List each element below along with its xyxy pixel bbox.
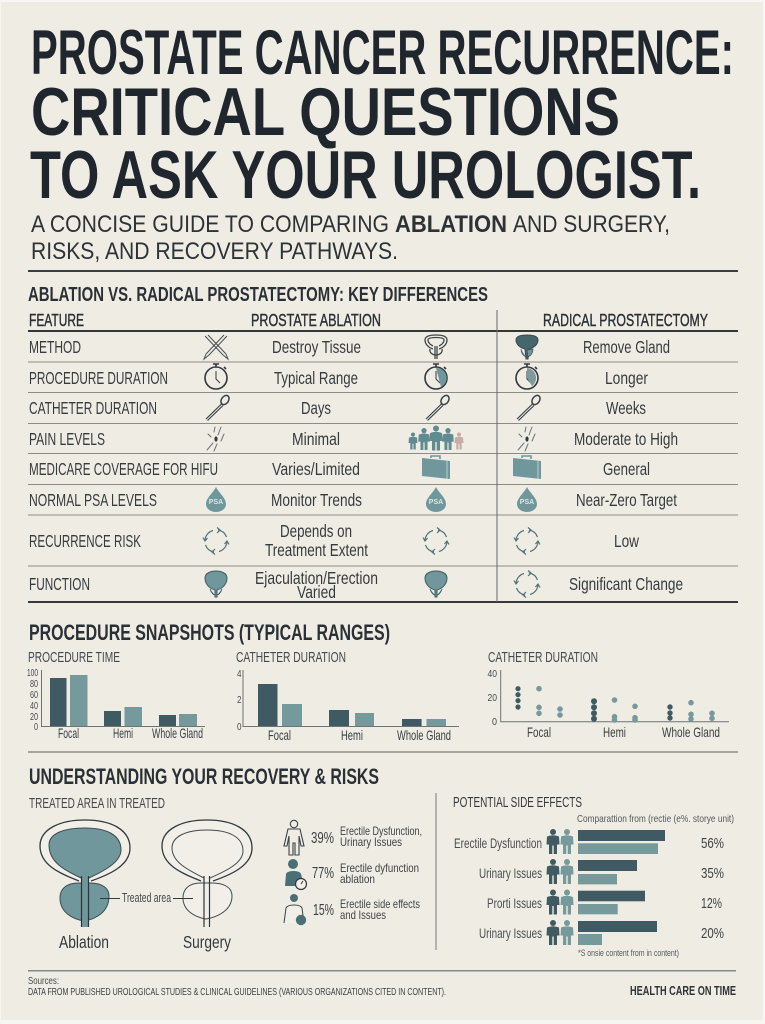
row: function xyxy=(29,568,683,602)
diagram: surgery prostate xyxy=(162,820,252,952)
stat: 77 percent: ablation xyxy=(340,872,375,886)
bar chart: catheter duration: 0 xyxy=(237,721,242,733)
bar chart: procedure time: Hemi xyxy=(113,725,133,741)
callout: treated area: Treated area xyxy=(122,891,171,905)
row: function: Ejaculation/Erection xyxy=(255,568,378,588)
table header xyxy=(29,310,708,330)
title: CRITICAL QUESTIONS xyxy=(31,74,620,150)
bar chart: procedure time: PROCEDURE TIME xyxy=(28,650,120,666)
heading: recovery and risks: UNDERSTANDING YOUR RECOVERY & RISKS xyxy=(29,764,379,789)
row: method: METHOD xyxy=(29,337,81,357)
row: pain levels xyxy=(29,426,678,451)
row: recurrence risk: RECURRENCE RISK xyxy=(29,531,141,551)
table header: PROSTATE ABLATION xyxy=(251,310,381,330)
stat: 15 percent xyxy=(284,894,420,925)
sources: Sources: xyxy=(28,975,59,987)
diagram: ablation prostate xyxy=(40,820,130,952)
stat: 15 percent: 15% xyxy=(313,902,334,919)
row: pain levels: Minimal xyxy=(292,429,340,449)
row: medicare coverage xyxy=(29,456,650,479)
bar chart: procedure time: Whole Gland xyxy=(152,725,203,741)
row: catheter duration: Days xyxy=(301,398,331,418)
side effect row: urinary issues xyxy=(479,859,724,884)
row: function: Varied xyxy=(297,582,336,602)
row: normal psa levels: Near-Zero Target xyxy=(576,490,677,510)
row: normal psa levels: Monitor Trends xyxy=(271,490,362,510)
stat: 15 percent: and Issues xyxy=(340,908,386,922)
bar chart: procedure time: Focal xyxy=(58,725,79,741)
side effect row: prorti issues: 12% xyxy=(701,895,722,912)
row: function: FUNCTION xyxy=(29,574,90,594)
dot plot: catheter duration xyxy=(488,650,729,740)
row: function: Significant Change xyxy=(569,574,683,594)
side effect row: erectile dysfunction: Erectile Dysfunction xyxy=(454,835,542,851)
row: procedure duration: Typical Range xyxy=(274,368,358,388)
bar chart: catheter duration: CATHETER DURATION xyxy=(236,650,346,666)
row: pain levels: Moderate to High xyxy=(574,429,678,449)
table header: FEATURE xyxy=(29,310,84,330)
row: medicare coverage: MEDICARE COVERAGE FOR HIFU xyxy=(29,459,218,479)
row: procedure duration: Longer xyxy=(605,368,648,388)
dot plot: catheter duration: 40 xyxy=(488,668,497,680)
row: recurrence risk xyxy=(29,521,639,560)
stat: 39 percent xyxy=(284,820,422,855)
subtitle: AND SURGERY, xyxy=(513,211,670,238)
row: normal psa levels xyxy=(29,487,677,512)
bar chart: catheter duration xyxy=(236,650,459,743)
diagram: surgery prostate: Surgery xyxy=(183,932,231,952)
stat: 77 percent xyxy=(285,859,419,890)
side effect row: urinary issues: 35% xyxy=(701,865,724,882)
dot plot: catheter duration: Whole Gland xyxy=(662,724,720,740)
bar chart: procedure time: 80 xyxy=(30,678,38,690)
bar chart: procedure time: 20 xyxy=(30,711,38,723)
side effect row: erectile dysfunction xyxy=(454,829,724,854)
dot plot: catheter duration: Hemi xyxy=(603,724,626,740)
dot plot: catheter duration: Focal xyxy=(527,724,551,740)
sources: DATA FROM PUBLISHED UROLOGICAL STUDIES & CLINICAL GUIDELINES (VARIOUS ORGANIZATIONS CITED IN CONTENT). xyxy=(28,986,446,998)
row: method xyxy=(29,335,670,359)
stat: 39 percent: 39% xyxy=(311,830,334,847)
row: catheter duration xyxy=(29,394,646,420)
row: method: Remove Gland xyxy=(583,337,670,357)
subtitle xyxy=(31,211,670,265)
bar chart: catheter duration: Hemi xyxy=(341,727,363,743)
dot plot: catheter duration: CATHETER DURATION xyxy=(488,650,598,666)
panel: potential side effects: POTENTIAL SIDE EFFECTS xyxy=(453,794,582,811)
stat: 77 percent: 77% xyxy=(312,865,334,882)
heading: procedure snapshots: PROCEDURE SNAPSHOTS (TYPICAL RANGES) xyxy=(29,620,390,645)
diagram: ablation prostate: Ablation xyxy=(59,932,109,952)
stat: 15 percent: Erectile side effects xyxy=(340,897,420,911)
stat: 77 percent: Erectile dyfunction xyxy=(340,861,419,875)
row: catheter duration: Weeks xyxy=(606,398,646,418)
bar chart: procedure time: 100 xyxy=(27,667,38,679)
dot plot: catheter duration: 20 xyxy=(488,692,497,704)
row: medicare coverage: Varies/Limited xyxy=(272,459,360,479)
sources xyxy=(28,975,446,998)
row: normal psa levels: PSA xyxy=(429,499,443,506)
dot plot: catheter duration: 0 xyxy=(492,716,497,728)
panel: potential side effects xyxy=(453,794,734,959)
side effect row: prorti issues xyxy=(487,890,722,914)
row: catheter duration: CATHETER DURATION xyxy=(29,398,157,418)
row: normal psa levels: NORMAL PSA LEVELS xyxy=(29,490,157,510)
side effect row: erectile dysfunction: 56% xyxy=(701,835,724,852)
side effect row: prorti issues: Prorti Issues xyxy=(487,895,542,911)
stat: 39 percent: Urinary Issues xyxy=(340,835,402,849)
row: recurrence risk: Low xyxy=(614,531,639,551)
bar chart: catheter duration: Focal xyxy=(268,727,291,743)
bar chart: procedure time xyxy=(27,650,205,741)
row: medicare coverage: General xyxy=(603,459,650,479)
bar chart: procedure time: 60 xyxy=(30,689,38,701)
subtitle: ABLATION xyxy=(395,211,507,238)
side effect row: urinary issues: Urinary Issues xyxy=(479,865,542,881)
stat: 39 percent: Erectile Dysfunction, xyxy=(340,824,422,838)
bar chart: catheter duration: 2 xyxy=(237,694,242,706)
row: recurrence risk: Depends on xyxy=(280,521,352,541)
heading: key differences: ABLATION VS. RADICAL PROSTATECTOMY: KEY DIFFERENCES xyxy=(28,283,488,306)
row: pain levels: PAIN LEVELS xyxy=(29,429,105,449)
row: procedure duration xyxy=(29,364,648,389)
row: procedure duration: PROCEDURE DURATION xyxy=(29,368,168,388)
subtitle: A CONCISE GUIDE TO COMPARING xyxy=(31,211,389,238)
comparison table xyxy=(28,310,738,603)
row: normal psa levels: PSA xyxy=(520,499,534,506)
subheading: treated area: TREATED AREA IN TREATED xyxy=(29,796,165,812)
row: method: Destroy Tissue xyxy=(272,337,361,357)
panel: potential side effects: *S onsie content from in content) xyxy=(578,948,679,959)
row: recurrence risk: Treatment Extent xyxy=(265,540,368,560)
side effect row: urinary issues second: 20% xyxy=(701,925,724,942)
bar chart: catheter duration: Whole Gland xyxy=(397,727,451,743)
side effect row: urinary issues second xyxy=(479,920,724,945)
row: normal psa levels: PSA xyxy=(209,499,223,506)
bar chart: procedure time: 40 xyxy=(30,700,38,712)
subtitle: RISKS, AND RECOVERY PATHWAYS. xyxy=(31,238,398,265)
bar chart: procedure time: 0 xyxy=(34,721,38,733)
bar chart: catheter duration: 4 xyxy=(237,668,242,680)
side effect row: urinary issues second: Urinary Issues xyxy=(479,925,542,941)
title xyxy=(30,18,734,213)
